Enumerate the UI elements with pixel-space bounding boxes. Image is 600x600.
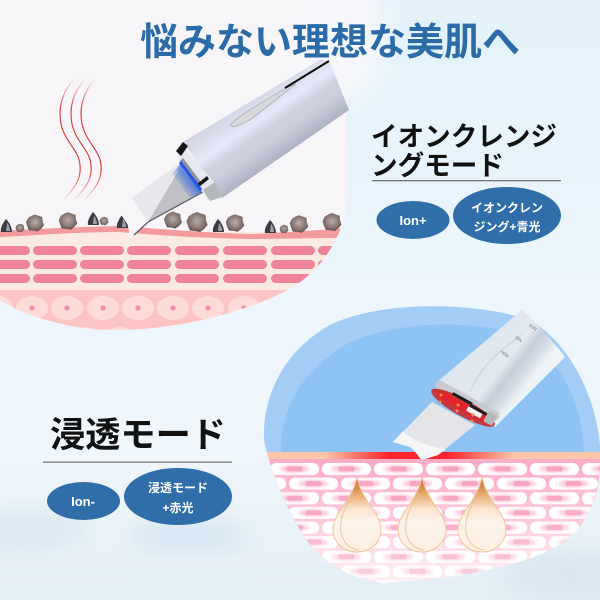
badge: ion cleansing + blue light: イオンクレン (471, 201, 543, 215)
device blade (120, 163, 203, 238)
device head (176, 142, 222, 201)
drops (333, 477, 506, 552)
drop 1 (333, 477, 381, 552)
device mode labels (499, 323, 538, 359)
skin cells (0, 296, 258, 330)
device body (183, 60, 349, 198)
badge: Ion- (47, 482, 120, 520)
skin bars (0, 246, 362, 283)
badge: Ion-: Ion- (71, 494, 95, 509)
heading: ion cleansing mode (371, 122, 557, 181)
divider line (43, 462, 232, 463)
badge: ion cleansing + blue light: ジング+青光 (473, 219, 541, 234)
device blade (393, 402, 475, 460)
title: 悩みない理想な美肌へ (140, 22, 520, 64)
drop 3 (458, 477, 506, 552)
heading: ion cleansing mode: イオンクレンジ (371, 122, 557, 152)
device: ion cleansing scrubber (120, 60, 349, 238)
device mode labels: ION (514, 335, 523, 343)
skin diagram: penetration (255, 452, 600, 592)
badge: penetration + red light: 浸透モード (148, 480, 208, 495)
panel: top-left white blob (0, 0, 348, 330)
drop 2 (398, 477, 446, 552)
badge: penetration + red light (124, 468, 232, 525)
device mode labels: ESS (528, 323, 538, 332)
icon: red heat waves (60, 78, 101, 201)
device body (437, 310, 565, 427)
badge: penetration + red light: +赤光 (162, 500, 194, 515)
badge: Ion+: Ion+ (399, 213, 427, 228)
skin diagram: ion cleansing (0, 226, 341, 330)
heading: ion cleansing mode: ングモード (371, 150, 504, 181)
heading: penetration mode: 浸透モード (50, 416, 226, 455)
panel: blue blob (264, 306, 600, 583)
device mode labels: +ION (499, 349, 510, 359)
device: penetration scrubber (393, 310, 565, 460)
blackheads (1, 212, 341, 233)
badge: ion cleansing + blue light (453, 187, 561, 244)
device head with red lights (427, 379, 501, 433)
divider line (372, 180, 561, 181)
badge: Ion+ (376, 201, 450, 239)
soft highlight blending the blob into the sky (305, 0, 385, 100)
device slot (231, 84, 296, 126)
